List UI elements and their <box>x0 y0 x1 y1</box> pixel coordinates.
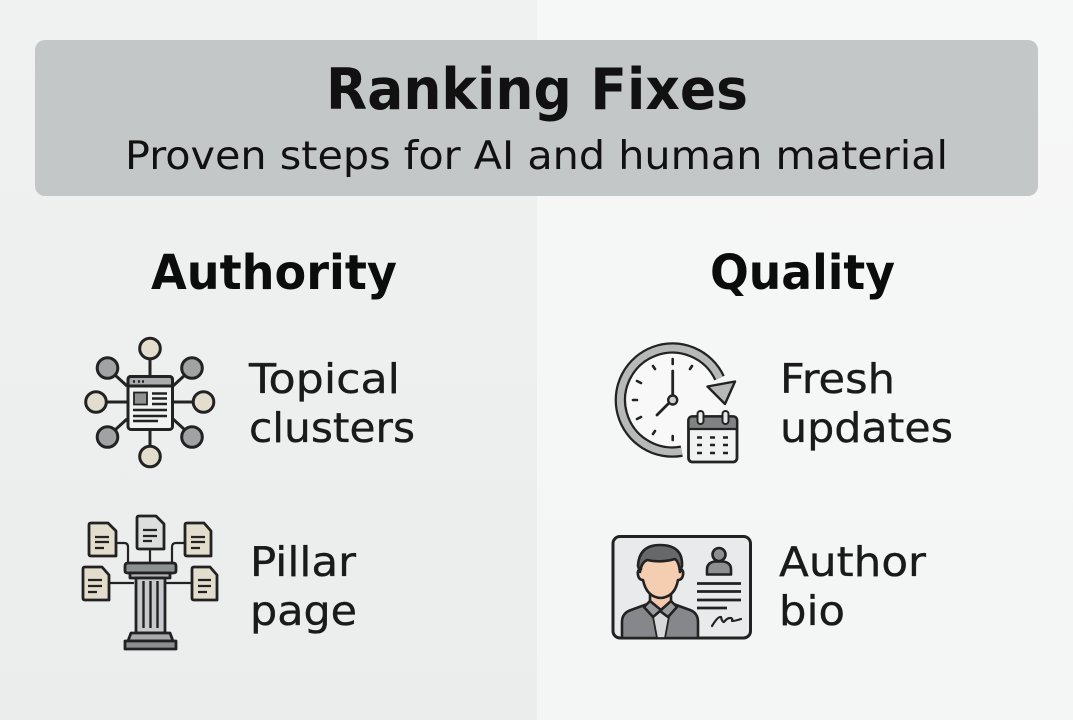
text: Fresh updates: updates <box>780 404 953 452</box>
text: Pillar page <box>250 538 357 635</box>
heading: Quality: Quality <box>710 245 895 301</box>
panel: header banner <box>35 40 1038 196</box>
text: Pillar page: page <box>250 587 357 635</box>
text: Pillar page: Pillar <box>250 538 356 586</box>
icon: clock with calendar <box>620 348 737 462</box>
text: Fresh updates: Fresh <box>780 355 895 403</box>
subtitle: Proven steps for AI and human material <box>125 134 948 179</box>
text: Fresh updates <box>780 355 953 452</box>
text: Author bio <box>779 538 926 635</box>
text: Author bio: bio <box>779 587 845 635</box>
heading: Authority: Authority <box>151 245 397 301</box>
title: Ranking Fixes <box>326 57 748 123</box>
icon: author bio card <box>613 536 750 638</box>
icon: topical clusters hub <box>86 338 214 467</box>
text: Topical clusters: Topical <box>248 355 400 403</box>
icon: pillar page <box>83 516 217 649</box>
text: Author bio: Author <box>779 538 926 586</box>
text: Topical clusters: clusters <box>249 404 415 452</box>
text: Topical clusters <box>248 355 415 452</box>
